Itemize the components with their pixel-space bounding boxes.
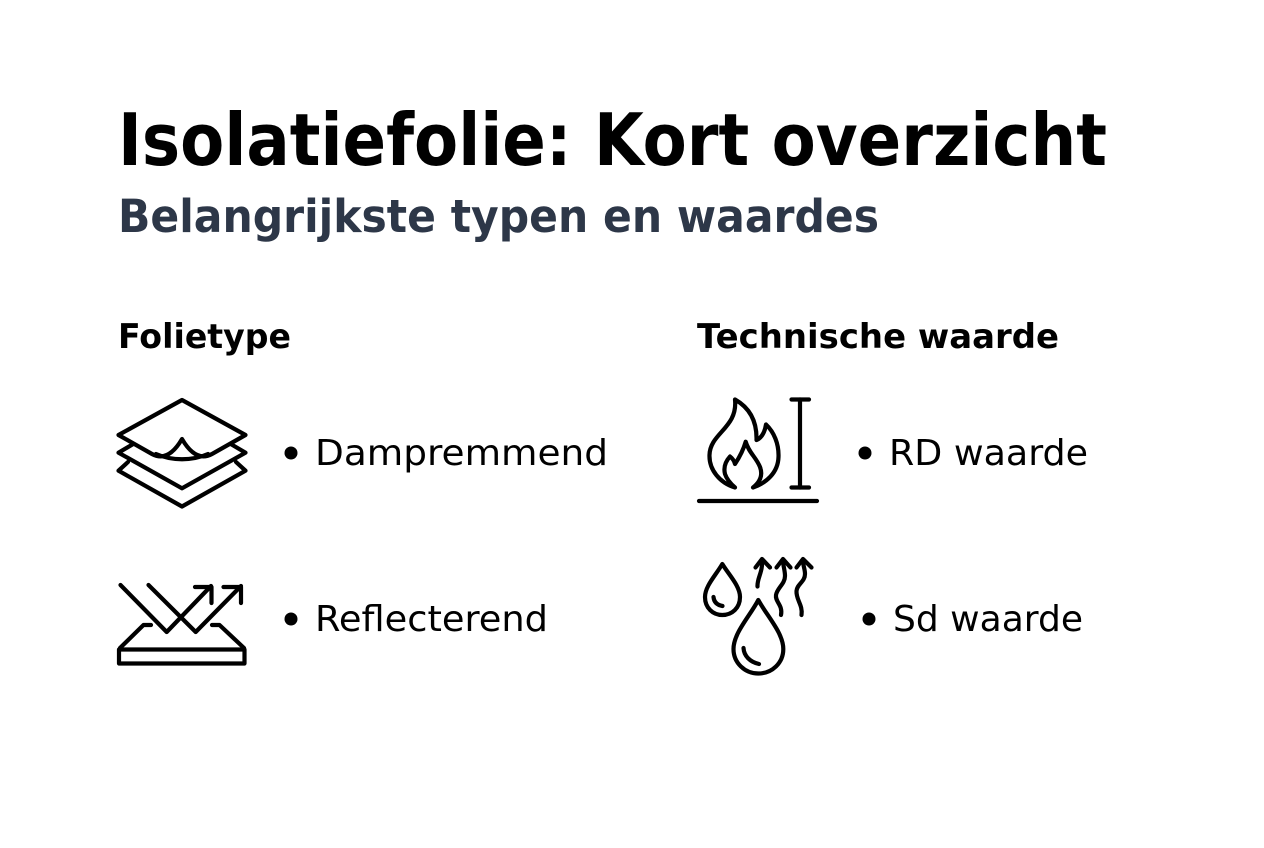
- icon: drops and vapour arrows: [705, 559, 812, 674]
- icon: reflecting rays: [119, 585, 244, 664]
- icon: flame with thickness bar: [699, 400, 817, 501]
- item: sd waarde: Sd waarde: [893, 599, 1083, 640]
- heading: technische waarde: Technische waarde: [697, 317, 1059, 357]
- panel: technische waarde: [697, 317, 1088, 674]
- icon: stacked foil layers: [118, 400, 246, 506]
- heading: folietype: Folietype: [118, 317, 291, 357]
- panel: folietype: [118, 317, 608, 664]
- item: rd waarde: RD waarde: [889, 433, 1088, 474]
- item: dampremmend: Dampremmend: [315, 433, 608, 474]
- item: reflecterend: Reflecterend: [315, 599, 548, 640]
- title: Isolatiefolie: Kort overzicht: [118, 98, 1107, 182]
- subtitle: Belangrijkste typen en waardes: [118, 190, 879, 243]
